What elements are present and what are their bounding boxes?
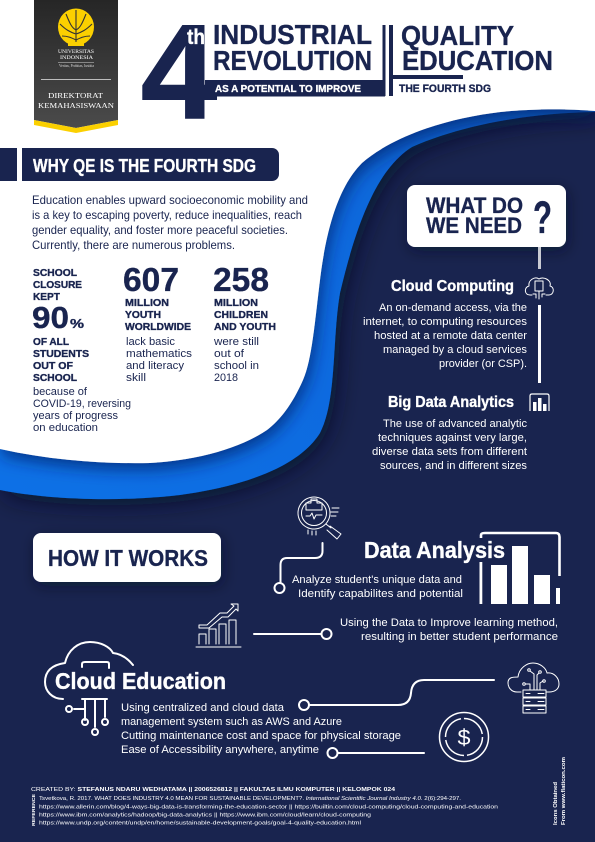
intro paragraph: gender equality, and foster more peaceful societies.	[32, 223, 288, 237]
icon: large bar chart	[480, 533, 560, 604]
stat: 258 million children: MILLION	[214, 297, 258, 309]
stat: 258 million children: 2018	[214, 372, 238, 384]
text block: cloud computing: Cloud Computing	[391, 278, 514, 295]
stat: school closure 90%: 90	[32, 300, 69, 335]
stat: 607 million youth	[123, 261, 192, 384]
stat: 607 million youth: YOUTH	[125, 309, 161, 321]
white upper panel	[0, 0, 595, 463]
text block: improve learning method: resulting in better student performance	[361, 631, 558, 643]
heading: data analysis: Data Analysis	[364, 537, 505, 563]
stat: school closure 90%: CLOSURE	[33, 279, 82, 291]
connector: data analysis circle	[274, 543, 322, 593]
text block: big data analytics: The use of advanced analytic	[383, 418, 527, 430]
stat: school closure 90%	[32, 267, 131, 434]
connector: improve learning	[254, 629, 332, 639]
intro paragraph	[32, 193, 308, 252]
callout: what do we need: WHAT DO	[426, 193, 523, 218]
stat: 607 million youth: mathematics	[126, 348, 192, 360]
text block: big data analytics: diverse data sets from different	[372, 446, 528, 458]
title block: AS A POTENTIAL TO IMPROVE	[215, 83, 361, 95]
footer references: https://www.ibm.com/analytics/hadoop/big-data-analytics || https://www.ibm.com/cloud/learn/cloud-computing	[39, 812, 371, 818]
footer references: https://www.undp.org/content/undp/en/home/sustainable-development-goals/goal-4-quality-education.html	[39, 820, 361, 826]
icon: growth chart with arrow	[196, 604, 241, 647]
stat: 607 million youth: lack basic	[126, 336, 175, 348]
stat: school closure 90%: because of	[33, 386, 88, 398]
stat: 607 million youth: WORLDWIDE	[125, 321, 191, 333]
icon: magnifier with chart	[298, 497, 341, 539]
text block: cloud education details: management system such as AWS and Azure	[121, 716, 342, 728]
text block: cloud computing	[363, 278, 527, 370]
heading: quality education: QUALITY	[401, 20, 514, 51]
logo banner: Universitas Indonesia, Direktorat Kemahasiswaan: UNIVERSITAS	[58, 49, 94, 55]
logo banner: Universitas Indonesia, Direktorat Kemahasiswaan	[34, 0, 118, 133]
icon credit: From www.flaticon.com	[561, 757, 567, 825]
stat: 258 million children: out of	[214, 348, 245, 360]
stat: school closure 90%: KEPT	[33, 291, 61, 303]
icon: cloud computing	[525, 278, 553, 299]
text block: big data analytics	[372, 394, 528, 472]
text block: cloud computing: hosted at a remote data center	[374, 330, 527, 342]
intro paragraph: Education enables upward socioeconomic mobility and	[32, 193, 308, 207]
stat: school closure 90%: %	[70, 316, 85, 331]
stat: school closure 90%: SCHOOL	[33, 372, 78, 384]
stat: school closure 90%: STUDENTS	[33, 348, 89, 360]
text block: cloud education details	[121, 702, 401, 756]
icon: yellow university emblem	[58, 8, 94, 46]
icon: cloud outline with circuit	[45, 642, 133, 735]
stat: school closure 90%: SCHOOL	[33, 267, 78, 279]
heading: industrial revolution: INDUSTRIAL	[213, 19, 372, 50]
text block: analyze student data	[292, 574, 463, 600]
heading: why QE is the fourth SDG	[0, 148, 279, 181]
text block: cloud computing: provider (or CSP).	[439, 358, 527, 370]
footer references: https://www.allerin.com/blog/4-ways-big-data-is-transforming-the-education-sector || https://builtin.com/cloud-computing/cloud-computing-and-education	[39, 804, 498, 810]
stat: 258 million children: school in	[214, 360, 259, 372]
logo banner: Universitas Indonesia, Direktorat Kemahasiswaan: INDONESIA	[60, 55, 93, 61]
icon credit	[553, 757, 567, 825]
footer references: REFERENCE	[31, 794, 36, 826]
title block: THE FOURTH SDG	[399, 83, 491, 95]
text block: cloud education details: Ease of Accessibility anywhere, anytime	[121, 744, 319, 756]
stat: 607 million youth: MILLION	[125, 297, 169, 309]
title block: REVOLUTION	[213, 45, 372, 76]
subheading bar	[205, 80, 385, 96]
stat: school closure 90%: on education	[33, 422, 98, 434]
text block: improve learning method: Using the Data to Improve learning method,	[340, 617, 558, 629]
connector: accessibility to dollar	[328, 748, 424, 758]
text block: big data analytics: techniques against very large,	[378, 432, 527, 444]
logo banner: Universitas Indonesia, Direktorat Kemahasiswaan: KEMAHASISWAAN	[38, 101, 115, 110]
text block: big data analytics: sources, and in different sizes	[380, 460, 527, 472]
connector: what do we need to cloud computing	[538, 247, 541, 269]
logo banner: Universitas Indonesia, Direktorat Kemahasiswaan: Veritas, Probitas, Iustitia	[59, 64, 94, 69]
icon: dollar coin	[440, 712, 488, 762]
intro paragraph: is a key to escaping poverty, reduce inequalities, reach	[32, 208, 302, 222]
connector: centralized data to server	[299, 680, 494, 710]
icon: big data chart	[530, 394, 549, 411]
callout: how it works: HOW IT WORKS	[48, 545, 208, 571]
logo banner: Universitas Indonesia, Direktorat Kemahasiswaan: DIREKTORAT	[48, 91, 103, 100]
text block: improve learning method	[340, 617, 558, 643]
text block: big data analytics: Big Data Analytics	[388, 394, 514, 411]
stat: 258 million children: were still	[213, 336, 259, 348]
text block: cloud computing: internet, to computing resources	[363, 316, 527, 328]
intro paragraph: Currently, there are numerous problems.	[32, 238, 235, 252]
stat: school closure 90%: years of progress	[33, 410, 118, 422]
callout: how it works	[33, 533, 221, 582]
text block: cloud education details: Cutting maintenance cost and space for physical storage	[121, 730, 401, 742]
big numeral 4: 4	[141, 0, 217, 147]
stat: school closure 90%: OUT OF	[33, 360, 74, 372]
footer references	[31, 794, 498, 826]
footer credits: CREATED BY: STEFANUS NDARU WEDHATAMA || 2006526812 || FAKULTAS ILMU KOMPUTER || KELOMPOK 024	[31, 787, 396, 793]
icon credit: Icons Obtained	[553, 782, 559, 825]
stat: 607 million youth: skill	[126, 372, 146, 384]
text block: cloud computing: managed by a cloud services	[383, 344, 527, 356]
stat: school closure 90%: OF ALL	[33, 336, 70, 348]
text block: analyze student data: Analyze student's unique data and	[292, 574, 462, 586]
callout: what do we need: WE NEED	[426, 213, 522, 238]
stat: 258 million children: AND YOUTH	[214, 321, 276, 333]
stat: 607 million youth: and literacy	[126, 360, 184, 372]
title block	[141, 0, 553, 147]
callout: what do we need	[407, 185, 566, 247]
title block: EDUCATION	[402, 45, 553, 76]
blue wave band	[0, 0, 595, 499]
text block: cloud computing: An on-demand access, via the	[379, 302, 527, 314]
icon: cloud server	[508, 663, 559, 713]
stat: 258 million children: CHILDREN	[214, 309, 268, 321]
heading: cloud education: Cloud Education	[55, 668, 226, 694]
stat: school closure 90%: COVID-19, reversing	[33, 398, 131, 410]
ordinal th: th	[187, 26, 205, 49]
text block: analyze student data: Identify capabilites and potential	[298, 588, 463, 600]
stat: 258 million children	[213, 261, 276, 384]
text block: cloud education details: Using centralized and cloud data	[121, 702, 285, 714]
heading: why QE is the fourth SDG: WHY QE IS THE FOURTH SDG	[33, 156, 256, 176]
connector: cloud computing to big data	[538, 305, 541, 383]
callout: what do we need: ?	[533, 192, 552, 243]
stat: 607 million youth: 607	[123, 261, 179, 298]
footer references: Tsvetkova, R. 2017. WHAT DOES INDUSTRY 4.0 MEAN FOR SUSTAINABLE DEVELOPMENT?. International Scientific Journal Industry 4.0. 2(6):294-297.	[39, 796, 461, 802]
stat: 258 million children: 258	[213, 261, 269, 298]
icon: dollar coin: $	[458, 725, 470, 750]
